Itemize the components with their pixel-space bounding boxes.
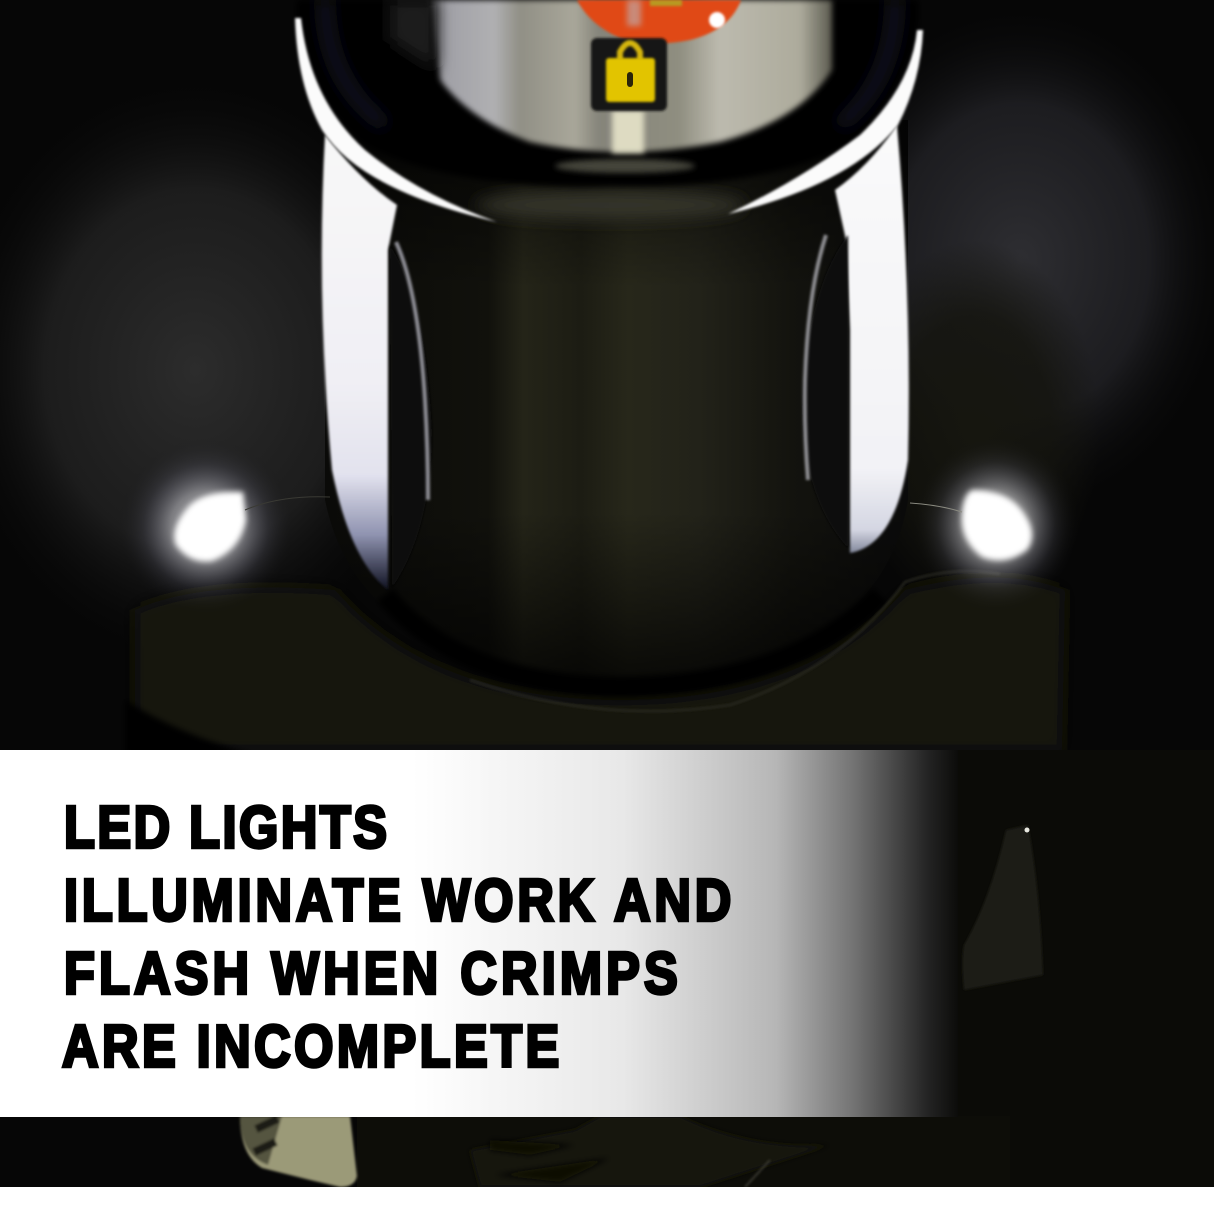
orange circle: [577, 0, 741, 44]
lock keyhole: [627, 72, 633, 87]
left white rim arc: [295, 18, 497, 222]
light stripe under label: [612, 110, 644, 153]
left groove in neck: [388, 246, 391, 339]
cream grip label: [240, 1115, 357, 1187]
gradient caption panel: [0, 750, 958, 1117]
yellow mark in orange circle: [650, 0, 682, 6]
right backdrop glow: [902, 58, 1187, 438]
right LED: [962, 490, 1032, 560]
reflection under cylinder: [555, 159, 695, 173]
right groove in neck: [812, 234, 850, 546]
trigger bright dot: [1024, 828, 1030, 832]
cup inner rim tone right: [840, 0, 895, 125]
left LED glow: [135, 457, 277, 600]
LED wire left: [245, 497, 330, 510]
caption text: ILLUMINATE WORK AND: [64, 866, 731, 933]
caption text: [62, 793, 731, 1079]
cup inner rim tone: [325, 0, 385, 125]
right groove highlight: [805, 235, 826, 480]
left lit neck band: [322, 135, 397, 590]
orange circle detail: [627, 0, 641, 26]
trigger shape: [962, 825, 1043, 990]
caption text: LED LIGHTS: [64, 793, 387, 860]
left groove highlight: [396, 242, 428, 500]
cylinder dark left side: [390, 0, 436, 70]
left LED: [174, 492, 246, 561]
lower right housing tone: [958, 750, 1214, 1187]
right lit neck band: [835, 125, 909, 553]
lock shackle: [620, 43, 640, 60]
left backdrop glow: [6, 142, 332, 592]
black collar groove around neck: [390, 596, 784, 696]
lock label: [591, 38, 667, 111]
tool base housing: [140, 583, 1060, 744]
right white rim arc: [728, 30, 923, 214]
lower grip: [357, 1116, 1010, 1187]
lower collar edge: [470, 571, 1000, 711]
olive collar band: [475, 191, 745, 219]
lock body: [606, 58, 655, 102]
reflection spot: [709, 12, 725, 28]
LED wire right: [910, 503, 962, 512]
tool neck body: [325, 120, 908, 680]
silver cylinder: [430, 0, 832, 152]
caption text: ARE INCOMPLETE: [62, 1012, 559, 1079]
right olive shadow area: [906, 266, 1070, 550]
right LED glow: [928, 453, 1065, 598]
caption text: FLASH WHEN CRIMPS: [64, 939, 678, 1006]
black cup around cylinder: [448, 131, 814, 188]
